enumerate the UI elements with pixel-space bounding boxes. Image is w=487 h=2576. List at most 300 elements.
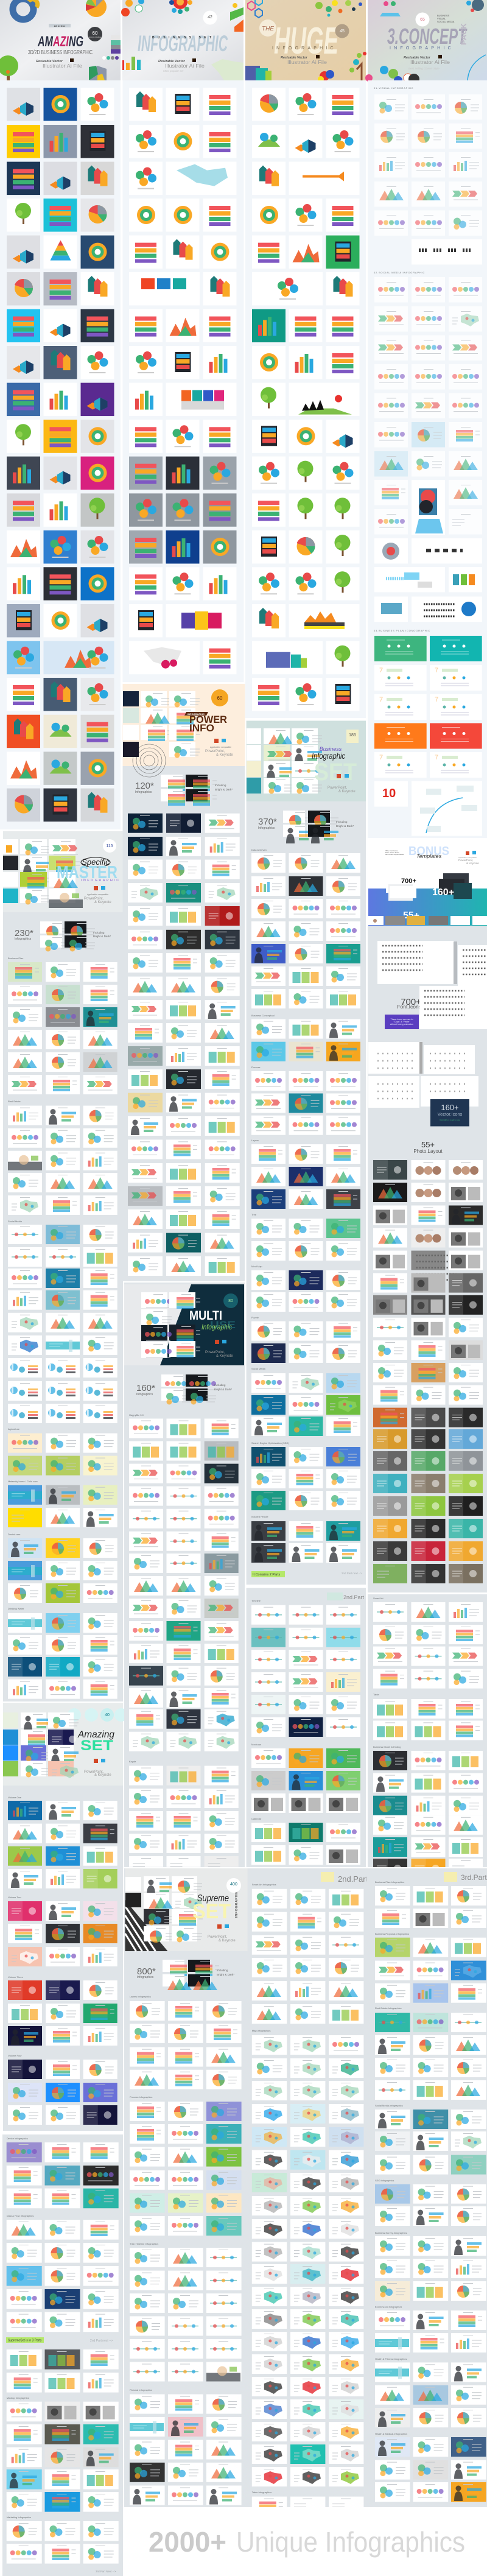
row bbox=[374, 752, 482, 778]
stat: 700+ font icons: Font.Icons bbox=[397, 1004, 421, 1010]
row bbox=[130, 2417, 242, 2437]
row bbox=[129, 346, 236, 379]
row bbox=[7, 567, 114, 600]
row bbox=[7, 2521, 119, 2541]
badge: 60 bbox=[211, 689, 228, 706]
row bbox=[128, 1186, 240, 1206]
text: app compatible: & Keynote bbox=[94, 901, 111, 904]
title: set: SET bbox=[314, 759, 357, 786]
row bbox=[8, 1336, 117, 1355]
label: 3rd part bbox=[444, 1872, 487, 1882]
row bbox=[252, 2264, 363, 2284]
hero left crop bbox=[247, 728, 261, 794]
row bbox=[130, 2001, 242, 2021]
tile: social cloud bbox=[374, 538, 408, 564]
row bbox=[128, 883, 240, 903]
bright and dark samples bbox=[283, 811, 338, 843]
icon sheet bbox=[419, 986, 487, 1029]
row bbox=[130, 2047, 242, 2067]
row bbox=[129, 1834, 239, 1853]
row bbox=[7, 493, 114, 527]
row bbox=[373, 1429, 483, 1449]
subtitle: INFOGRAPHIC bbox=[390, 46, 454, 51]
hero: business infographic set bbox=[247, 721, 366, 801]
banner: all in one: All in One bbox=[54, 24, 66, 27]
row bbox=[251, 1241, 360, 1261]
hero left crop thumbnails bbox=[3, 839, 18, 903]
stat: 160 infographics: 160* bbox=[136, 1383, 155, 1393]
badge: the: THE bbox=[262, 26, 274, 32]
row bbox=[8, 1381, 117, 1401]
subtitle: 3D/2D BUSINESS INFOGRAPHIC bbox=[28, 49, 93, 56]
row bbox=[373, 1859, 483, 1878]
text: 2nd part next: 2nd Part next --> bbox=[90, 2339, 113, 2343]
row bbox=[8, 1225, 117, 1244]
row bbox=[130, 2362, 242, 2381]
heading: device: Device Infographics bbox=[7, 2137, 28, 2140]
row bbox=[373, 1815, 483, 1835]
row bbox=[374, 480, 482, 505]
row bbox=[7, 2142, 119, 2163]
row bbox=[252, 2127, 363, 2147]
row bbox=[373, 1363, 483, 1382]
row bbox=[7, 457, 114, 490]
row bbox=[252, 1912, 363, 1932]
text: including bright and dark: Bright & Dark* bbox=[93, 935, 111, 938]
row bbox=[129, 1789, 239, 1808]
text: resizable vector: Resizable Vector bbox=[158, 60, 186, 63]
section: visual thumbnails bbox=[374, 94, 482, 236]
heading: ecommerce: Ecommerce.Infographics bbox=[375, 2306, 402, 2309]
row bbox=[7, 641, 114, 674]
row bbox=[8, 2004, 117, 2023]
row bbox=[374, 665, 482, 691]
row bbox=[130, 2024, 242, 2043]
list: layouts bbox=[385, 850, 404, 856]
text: including bright and dark: Bright & Dark* bbox=[336, 825, 354, 828]
row bbox=[128, 1093, 240, 1113]
text: including bright and dark: Bright & Dark* bbox=[217, 1973, 234, 1976]
row bbox=[8, 1924, 117, 1943]
tile: tall people cluster bbox=[412, 480, 445, 535]
row bbox=[128, 1209, 240, 1229]
callout: 160+ vector icons: Resizable & ready to use bbox=[440, 1119, 460, 1121]
text: app compatible bbox=[208, 1924, 236, 1943]
row bbox=[252, 2035, 363, 2055]
row bbox=[373, 1251, 483, 1280]
text: app compatible: & Keynote bbox=[94, 1773, 111, 1777]
row bbox=[252, 383, 359, 416]
heading: real estate: Real Estate bbox=[8, 1100, 21, 1103]
row bbox=[129, 383, 236, 416]
row bbox=[373, 1160, 483, 1180]
row bbox=[130, 2271, 242, 2290]
title: infographic: Infographic bbox=[312, 751, 345, 761]
title: 2000+ unique infographics: 2000+ bbox=[149, 2526, 226, 2558]
text: app compatible: Application compatible bbox=[458, 856, 477, 859]
row bbox=[375, 2206, 486, 2226]
panel: hero huge bbox=[245, 0, 366, 82]
row bbox=[7, 162, 114, 195]
row bbox=[130, 2317, 242, 2336]
row bbox=[251, 1071, 360, 1091]
label: 2nd part: 2nd.Part bbox=[338, 1874, 368, 1884]
row bbox=[128, 1163, 240, 1183]
panel: supreme set bbox=[124, 1868, 250, 2507]
photo strip bbox=[368, 916, 487, 925]
row bbox=[7, 346, 114, 379]
row bbox=[8, 1947, 117, 1966]
row bbox=[375, 2310, 486, 2330]
icon sheet bbox=[421, 1076, 478, 1107]
row bbox=[373, 1273, 483, 1293]
heading: business proposal: Business.Proposal.Infographics bbox=[375, 1932, 409, 1935]
row bbox=[251, 1144, 360, 1164]
chart: bars bbox=[122, 57, 141, 70]
hero: power info bbox=[123, 684, 245, 777]
title: amazing: Amazing bbox=[77, 1730, 114, 1740]
stat: 800 infographics: Infographics bbox=[137, 1976, 154, 1979]
row bbox=[130, 2102, 242, 2121]
row bbox=[129, 641, 236, 674]
hero: multi use bbox=[124, 1284, 244, 1365]
row bbox=[374, 335, 482, 361]
title: infographic script: Infographic bbox=[201, 1323, 232, 1331]
text: app compatible: & Keynote bbox=[216, 753, 233, 757]
row bbox=[128, 1000, 240, 1019]
people crowd bbox=[380, 1, 401, 16]
title: set: SET bbox=[192, 1900, 231, 1923]
row bbox=[252, 2150, 363, 2170]
row bbox=[252, 309, 359, 342]
row bbox=[252, 2309, 363, 2329]
text: app compatible: PowerPoint, bbox=[458, 859, 473, 862]
row bbox=[128, 1069, 240, 1089]
list: categories: VISUAL bbox=[437, 17, 446, 20]
icon sheet bbox=[368, 1042, 422, 1074]
list: categories: SOCIAL MEDIA bbox=[437, 20, 455, 23]
row bbox=[251, 921, 360, 941]
row bbox=[374, 451, 482, 476]
row bbox=[251, 1695, 360, 1714]
heading: business conceptual: Business Conceptual bbox=[251, 1014, 275, 1017]
row bbox=[251, 944, 360, 963]
row bbox=[252, 2444, 363, 2464]
row bbox=[7, 678, 114, 711]
row bbox=[251, 1094, 360, 1113]
tile: award logo: 10 bbox=[382, 787, 396, 800]
network bbox=[466, 0, 484, 12]
row bbox=[7, 530, 114, 564]
row bbox=[129, 236, 236, 269]
ribbon icons bbox=[230, 3, 244, 32]
stat: 55+ photo layout: Photo.Layout bbox=[413, 1149, 443, 1154]
subtitle: INFOGRAPHIC bbox=[81, 879, 121, 882]
row bbox=[374, 124, 482, 149]
row bbox=[129, 309, 236, 342]
row bbox=[252, 88, 359, 121]
label: 3rd part: 3rd.Part bbox=[461, 1873, 487, 1882]
badge: 40 bbox=[100, 1708, 114, 1722]
row bbox=[251, 1042, 360, 1061]
row bbox=[252, 162, 359, 195]
badge: 60: UNIQUE SAMPLE bbox=[89, 37, 102, 38]
row bbox=[375, 1938, 486, 1957]
row bbox=[373, 1647, 483, 1666]
heading: mockups: Mockups bbox=[251, 1743, 261, 1746]
text: resizable vector: Illustrator Ai File bbox=[165, 63, 205, 69]
heading: calendar: Calendar bbox=[251, 1817, 262, 1820]
panel: business infographic set bbox=[247, 721, 366, 1585]
row bbox=[130, 2440, 242, 2459]
dark icon sheets bbox=[439, 873, 472, 899]
row bbox=[251, 1116, 360, 1135]
row bbox=[251, 1321, 360, 1341]
panel: flat infographics grid bbox=[123, 80, 244, 682]
row bbox=[251, 1447, 360, 1466]
title: master: MASTER bbox=[57, 863, 117, 882]
row bbox=[7, 420, 114, 453]
row bbox=[252, 2058, 363, 2078]
row bbox=[129, 1732, 239, 1751]
hero: supreme set bbox=[125, 1868, 247, 1951]
panel: amazing set bbox=[3, 1703, 128, 2131]
row bbox=[129, 1554, 239, 1573]
row bbox=[375, 2110, 486, 2129]
heading: social media infographic: 02.SOCIAL MEDIA INFOGRAPHIC bbox=[374, 271, 425, 274]
panel: specific master bbox=[3, 831, 123, 1701]
row bbox=[129, 1419, 239, 1438]
row bbox=[252, 1981, 363, 2001]
row bbox=[251, 1521, 360, 1541]
row bbox=[373, 1699, 483, 1719]
row bbox=[7, 2312, 119, 2332]
badge: 65: 65 bbox=[420, 18, 425, 22]
row bbox=[374, 364, 482, 390]
row bbox=[8, 1613, 117, 1633]
text: resizable vector: Resizable Vector bbox=[404, 56, 431, 60]
row bbox=[252, 199, 359, 231]
panel: multi use bbox=[124, 1283, 245, 1870]
row bbox=[251, 1823, 360, 1842]
row bbox=[251, 1543, 360, 1563]
row bbox=[375, 2408, 486, 2427]
row bbox=[373, 1541, 483, 1561]
row bbox=[128, 1233, 240, 1253]
callout: contains 2 parts: It Contains 2 Parts bbox=[253, 1573, 280, 1577]
stat: 230 infographics: 230* bbox=[15, 928, 33, 938]
heading: tree: Tree bbox=[251, 1213, 257, 1216]
heading: layers: Layers Infographics bbox=[130, 1995, 151, 1998]
hero left crop bbox=[123, 691, 139, 757]
row bbox=[8, 1801, 117, 1820]
text: resizable vector bbox=[158, 58, 205, 72]
row bbox=[7, 2166, 119, 2186]
row bbox=[373, 1773, 483, 1793]
heading: volume two: Volume Two bbox=[8, 1896, 21, 1899]
row bbox=[375, 2013, 486, 2032]
row bbox=[373, 1295, 483, 1315]
row bbox=[129, 1621, 239, 1641]
text: app compatible: & Keynote bbox=[216, 1354, 233, 1358]
panel: hero amazing bbox=[0, 0, 121, 80]
row bbox=[129, 604, 236, 637]
badge: 60: 60 bbox=[217, 695, 223, 701]
heading: knyde: Knyde bbox=[129, 1760, 136, 1763]
hero thumbnails bbox=[264, 728, 322, 794]
row bbox=[8, 1538, 117, 1558]
row bbox=[374, 509, 482, 535]
row bbox=[373, 1625, 483, 1644]
row bbox=[128, 1139, 240, 1159]
note: copy and paste: "Copy" & "Paste" bbox=[393, 1021, 410, 1023]
stat: 370 infographics: 370* bbox=[258, 817, 277, 827]
row bbox=[8, 1824, 117, 1843]
label: 2nd part bbox=[327, 1592, 365, 1600]
stat: 160+: 160+ bbox=[432, 887, 454, 898]
row bbox=[251, 1167, 360, 1186]
row bbox=[375, 2333, 486, 2353]
row bbox=[128, 814, 240, 833]
row bbox=[130, 2170, 242, 2190]
row bbox=[128, 1023, 240, 1043]
row bbox=[129, 1464, 239, 1483]
row bbox=[251, 1395, 360, 1415]
hexagons bbox=[248, 0, 262, 18]
text: resizable vector bbox=[36, 58, 83, 69]
row bbox=[7, 309, 114, 342]
badge: 65 bbox=[415, 12, 430, 27]
text: including bright and dark: Bright & Dark* bbox=[214, 1388, 232, 1391]
row bbox=[8, 1561, 117, 1580]
list: layouts: 55+ Photo Layout Slides bbox=[385, 853, 404, 856]
row bbox=[375, 1983, 486, 2003]
row bbox=[252, 2196, 363, 2215]
heading: data driven: Data & Driven bbox=[251, 848, 267, 851]
row bbox=[251, 1793, 360, 1813]
row bbox=[8, 1508, 117, 1527]
row bbox=[8, 1456, 117, 1476]
title: specific: Specific bbox=[82, 857, 110, 867]
row bbox=[129, 1599, 239, 1618]
row bbox=[252, 420, 359, 453]
row bbox=[252, 2104, 363, 2124]
row bbox=[252, 2004, 363, 2024]
callout: supreme set parts: SupremeSet is in 3 Parts bbox=[8, 2338, 42, 2342]
title: 2000+ unique infographics bbox=[149, 2526, 465, 2558]
stat: 55+ photo layout bbox=[413, 1140, 443, 1154]
heading: map: Map.Infographics bbox=[252, 2029, 270, 2032]
row bbox=[252, 1958, 363, 1977]
text: resizable vector bbox=[404, 55, 450, 70]
icon: tree bbox=[0, 55, 18, 80]
heading: business model: Business Model & Ending bbox=[373, 1745, 401, 1748]
callout: supreme set parts bbox=[6, 2337, 44, 2343]
row bbox=[7, 789, 114, 822]
row bbox=[8, 1007, 117, 1027]
row bbox=[373, 1206, 483, 1225]
label: 2nd part bbox=[321, 1872, 368, 1884]
row bbox=[252, 567, 359, 600]
text: app compatible: PowerPoint, bbox=[208, 1935, 228, 1939]
row bbox=[375, 2362, 486, 2382]
note: copy and paste: These icons can use to bbox=[391, 1018, 413, 1021]
heading: social media: Social Media bbox=[8, 1220, 23, 1223]
row bbox=[252, 641, 359, 674]
heading: data and flow: Data & Flow Infographics bbox=[7, 2214, 33, 2217]
row bbox=[129, 162, 236, 195]
stat: 700+: 700+ bbox=[401, 878, 416, 885]
row bbox=[375, 2437, 486, 2457]
heading: puzzle: Puzzle bbox=[251, 1316, 259, 1319]
row bbox=[375, 2080, 486, 2100]
row bbox=[128, 1116, 240, 1136]
icon sheet bbox=[424, 1045, 475, 1074]
row bbox=[375, 1886, 486, 1906]
row bbox=[373, 1183, 483, 1202]
heading: business plan: Business Plan bbox=[8, 957, 23, 960]
list: categories: BUSINESS bbox=[437, 14, 450, 17]
row bbox=[129, 530, 236, 564]
badge: 60 bbox=[88, 27, 102, 41]
row bbox=[130, 2248, 242, 2267]
text: including bright and dark bbox=[214, 1384, 232, 1391]
row bbox=[128, 860, 240, 879]
row bbox=[252, 2081, 363, 2100]
row bbox=[375, 2259, 486, 2278]
stat: 160 infographics: Infographics bbox=[136, 1393, 153, 1396]
row bbox=[251, 1343, 360, 1363]
title: amazing: AMAZING bbox=[37, 33, 83, 50]
bright and dark samples bbox=[40, 921, 95, 951]
icons: powerpoint keynote bbox=[94, 886, 105, 890]
row bbox=[374, 306, 482, 331]
title: power info: INFO bbox=[189, 722, 214, 734]
text: including bright and dark: Including bbox=[93, 931, 105, 934]
heading: mockup: Mockup Infographics bbox=[7, 2396, 29, 2399]
row bbox=[251, 876, 360, 896]
footer white band bbox=[124, 2507, 487, 2576]
row bbox=[252, 2354, 363, 2374]
heading: maternity home: Maternity home / Child care bbox=[8, 1480, 38, 1483]
title: supreme: Supreme bbox=[197, 1893, 229, 1904]
subtitle: business set: BUSINESS SET bbox=[152, 36, 215, 40]
text: app compatible: & Keynote bbox=[219, 1939, 236, 1943]
text: app compatible bbox=[205, 739, 233, 757]
stat: 120 infographics: Infographics bbox=[135, 790, 152, 794]
heading: social media: Social.Media.Infographics bbox=[375, 2104, 403, 2107]
text: app compatible: PowerPoint, bbox=[84, 1770, 104, 1774]
hero: specific master bbox=[3, 831, 123, 912]
text: resizable vector: Best Selling Classic Style bbox=[408, 67, 440, 70]
heading: table: Table bbox=[373, 1693, 379, 1696]
row bbox=[251, 1416, 360, 1436]
row bbox=[8, 1680, 117, 1699]
note: copy and paste bbox=[385, 1015, 419, 1029]
pins bbox=[318, 70, 334, 82]
panel: vector infographics grid bbox=[245, 80, 366, 718]
tile: timeline arc bbox=[412, 781, 482, 836]
banner: all in one bbox=[49, 24, 71, 27]
row bbox=[251, 1292, 360, 1312]
banner: infographic bbox=[184, 712, 208, 716]
row bbox=[252, 2467, 363, 2486]
row bbox=[374, 723, 482, 749]
tile: award logo bbox=[374, 781, 408, 807]
row bbox=[374, 277, 482, 302]
title: power info: POWER bbox=[189, 714, 227, 725]
row bbox=[373, 1669, 483, 1689]
